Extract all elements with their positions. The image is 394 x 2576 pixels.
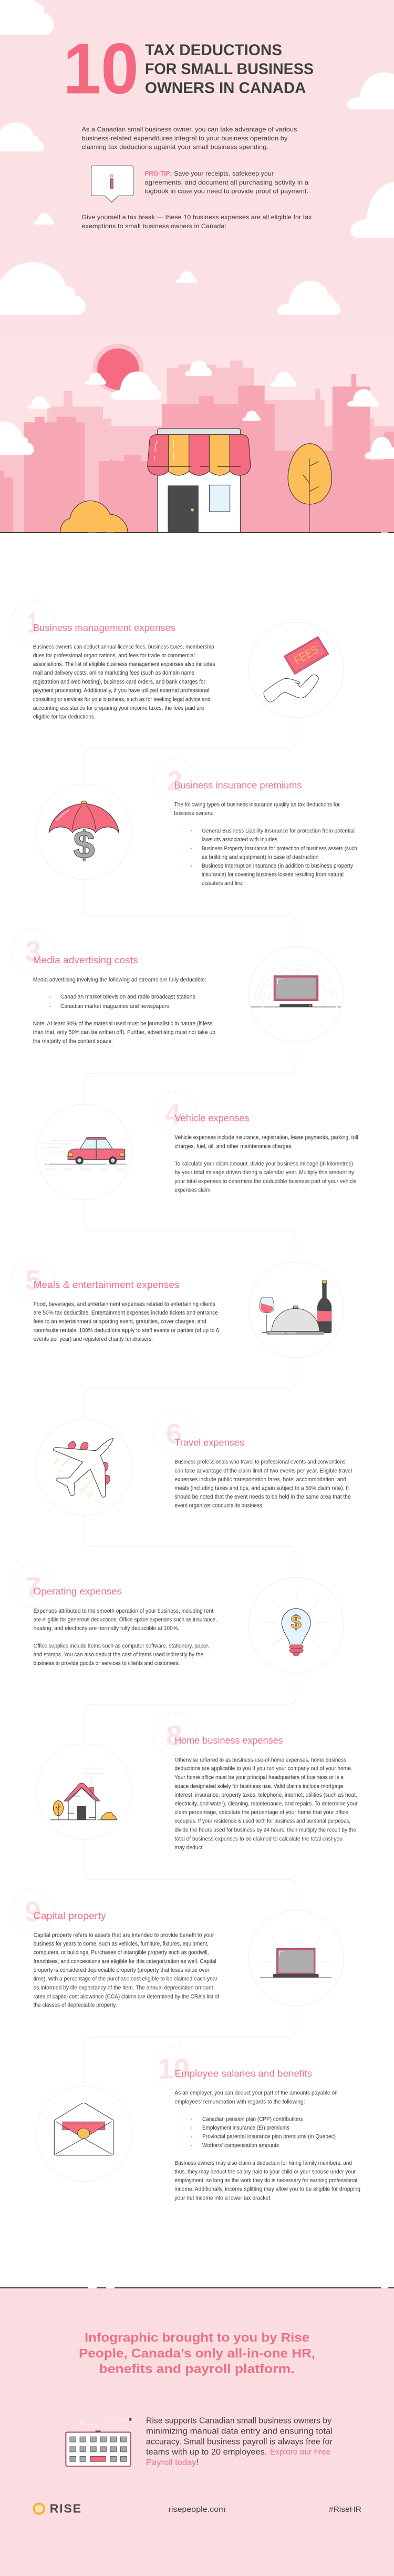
body text: Food, beverages, and entertainment expenses related to entertaining clients xyxy=(34,1301,215,1308)
sun xyxy=(92,344,143,393)
body text: As an employer, you can deduct your part of the amounts payable on xyxy=(174,2090,338,2096)
body text: expenses include public transportation fares, hotel accommodation, and xyxy=(174,1477,346,1483)
icon: umbrella over dollar: $ xyxy=(73,823,95,867)
body text: Business professionals who travel to professional events and conventions xyxy=(174,1459,346,1465)
heading: Meals & entertainment expenses xyxy=(34,1279,179,1290)
body text: event organizer conducts its business. xyxy=(174,1503,264,1509)
footer text: minimizing manual data entry and ensuring total xyxy=(146,2427,333,2436)
bullet list xyxy=(191,828,357,887)
pro-tip text: logbook in case you need to provide proof of payment. xyxy=(145,187,308,195)
bullet list: Business Interruption Insurance (in addition to business property xyxy=(202,863,354,869)
body text: To calculate your claim amount, divide your business mileage (in kilometres) xyxy=(174,1161,353,1167)
title: FOR SMALL BUSINESS xyxy=(145,60,314,78)
body text: heating, and electricity are normally fully deductible at 100%. xyxy=(34,1625,179,1632)
note text: Note: At least 80% of the material used must be journalistic in nature (if less xyxy=(33,1021,213,1027)
panel: 7 operating expenses xyxy=(12,1564,344,1673)
body text: rates of capital cost allowance (CCA) claims are determined by the CRA's list of xyxy=(34,1993,219,2000)
pro-tip text: Save your receipts, safekeep your xyxy=(174,170,274,177)
closing text: Business owners may also claim a deduction for hiring family members, and xyxy=(174,2160,352,2166)
body text xyxy=(34,1608,217,1667)
icon: light bulb with dollar: $ xyxy=(291,1611,302,1633)
body text xyxy=(174,2090,338,2105)
body text: payment processing. Additionally, if you have utilized external professional xyxy=(33,688,209,694)
closing intro text: Give yourself a tax break — these 10 business expenses are all eligible for tax xyxy=(81,213,312,221)
panel: 9 capital property: 9 xyxy=(25,1896,41,1928)
note text: the majority of the content space. xyxy=(33,1038,113,1044)
icon: light bulb with dollar xyxy=(248,1577,344,1673)
body text: dues for professional organizations, and fees for trade or commercial xyxy=(33,653,195,659)
body text: Capital property refers to assets that are intended to provide benefit to your xyxy=(34,1932,214,1939)
body text: Media advertising involving the following ad streams are fully deductible: xyxy=(33,976,206,983)
icon: television with signal arcs xyxy=(248,946,344,1042)
panel: 6 travel expenses: 6 xyxy=(166,1418,182,1450)
closing text: thus, they may deduct the salary paid to your child or your spouse under your xyxy=(174,2169,356,2175)
panel: 3 media advertising costs xyxy=(12,929,344,1044)
bullet list xyxy=(49,994,195,1010)
body text: eligible for tax deductions. xyxy=(33,714,96,720)
bush xyxy=(60,501,128,533)
closing text: income. Additionally, income splitting may allow you to be eligible for dropping xyxy=(174,2186,360,2193)
panel: 4 vehicle expenses xyxy=(36,1092,358,1200)
footer text: ! xyxy=(196,2458,199,2467)
icon: fees ticket in hand: FEES xyxy=(292,643,321,667)
body text: are 50% tax deductible. Entertainment expenses include tickets and entrance xyxy=(34,1310,218,1316)
body text xyxy=(174,1459,352,1509)
footer text: teams with up to 20 employees. xyxy=(146,2448,267,2457)
bullet list: Workers' compensation amounts xyxy=(202,2142,279,2149)
panel: 1 business management expenses: 1 xyxy=(27,607,38,639)
title: OWNERS IN CANADA xyxy=(145,79,306,97)
body text: business to provide goods or services to clients and customers. xyxy=(34,1661,180,1667)
panel: 5 meals and entertainment expenses xyxy=(12,1258,344,1358)
body text: and stamps. You can also deduct the cost of items used indirectly by the xyxy=(34,1652,203,1658)
bullet list: lawsuits associated with injuries xyxy=(202,837,277,843)
footer heading: Infographic brought to you by Rise xyxy=(85,2331,309,2345)
illustration: city skyline with storefront xyxy=(0,336,394,533)
bullet list: insurance) for covering business losses resulting from natural xyxy=(202,872,344,878)
body text: Vehicle expenses include insurance, registration, lease payments, parking, toll xyxy=(174,1135,358,1141)
body text: claim percentage, calculate the percentage of your home that your office xyxy=(174,1809,348,1816)
panel: 4 vehicle expenses: 4 xyxy=(165,1098,181,1129)
intro text: business-related expenditures integral to your business operation by xyxy=(81,135,287,142)
icon: airplane xyxy=(36,1420,132,1515)
panel: 2 business insurance premiums: 2 xyxy=(167,766,182,797)
bullet list xyxy=(191,2116,336,2149)
bullet list: Canadian pension plan (CPP) contributions xyxy=(202,2116,303,2122)
icon: house xyxy=(36,1744,132,1839)
body text: meals (including taxes and tips, and again subject to a 50% claim rate). It xyxy=(174,1485,349,1491)
bullet list: Canadian market television and radio broadcast stations xyxy=(60,994,195,1000)
heading: Capital property xyxy=(34,1910,107,1921)
heading: Operating expenses xyxy=(34,1586,122,1597)
body text: business for years to come, such as vehicles, furniture, fixtures, equipment, xyxy=(34,1941,209,1947)
bullet list: Employment insurance (EI) premiums xyxy=(202,2125,289,2131)
panel: 1 business management expenses xyxy=(12,600,344,720)
heading: Business insurance premiums xyxy=(174,779,302,791)
body text: space designated solely for business use. Valid claims include mortgage xyxy=(174,1783,343,1789)
body text: room/suite rentals. 100% deductions apply to staff events or parties (of up to 6 xyxy=(34,1327,219,1333)
panel: 3 media advertising costs: 3 xyxy=(25,936,41,968)
closing text: employment, so long as the work they do is necessary for earning professional xyxy=(174,2177,357,2184)
body text: mail and delivery costs, online marketing fees (such as domain name xyxy=(33,670,194,676)
body text: employees' remuneration with regards to the following: xyxy=(174,2099,305,2105)
heading: Employee salaries and benefits xyxy=(174,2068,312,2079)
title xyxy=(145,42,314,97)
icon: fees ticket in hand xyxy=(248,622,344,718)
heading: Vehicle expenses xyxy=(174,1113,249,1124)
logo: Rise xyxy=(34,2502,81,2516)
title: TAX DEDUCTIONS xyxy=(145,42,282,59)
body text: expenses claim. xyxy=(174,1187,212,1194)
footer text: Explore our Free xyxy=(270,2448,330,2457)
body text: charges, fuel, oil, and other maintenance charges. xyxy=(174,1144,293,1150)
heading: Media advertising costs xyxy=(33,954,138,965)
panel: header xyxy=(0,0,394,336)
body text: as informed by life expectancy of the item. The annual depreciation amount xyxy=(34,1984,213,1991)
panel: 5 meals and entertainment expenses: 5 xyxy=(25,1265,41,1296)
buildings: back layer xyxy=(0,361,394,533)
body text: business owners: xyxy=(174,810,213,817)
body text: registration and web hosting), business card orders, and bank charges for xyxy=(33,679,205,685)
footer heading xyxy=(79,2331,315,2376)
closing text: your net income into a lower tax bracket. xyxy=(174,2195,272,2201)
body text xyxy=(174,1135,358,1194)
bullet list: Provincial parental insurance plan premiums (in Quebec) xyxy=(202,2134,336,2140)
body text: are eligible for generous deductions. Office space expenses such as insurance, xyxy=(34,1617,217,1623)
body text: time), with a percentage of the purchase cost eligible to be claimed each year xyxy=(34,1976,217,1982)
clouds xyxy=(0,0,394,315)
storefront xyxy=(148,429,251,533)
note text: than that, only 50% can be written off). Further, advertising must not take up xyxy=(33,1030,215,1036)
body text: computers, or buildings. Purchases of intangible property such as goodwill, xyxy=(34,1950,209,1956)
body text: divide the hours used for business by 24 hours, then multiply the result by the xyxy=(174,1827,356,1833)
intro text: claiming tax deductions against your small business spending. xyxy=(81,144,268,151)
bullet list: as building and equipment) in case of destruction xyxy=(202,854,319,860)
bullet list: disasters and fire. xyxy=(202,880,244,887)
footer text: Payroll today xyxy=(146,2458,196,2467)
pro-tip text: agreements, and document all purchasing activity in a xyxy=(145,179,308,186)
bullet list: General Business Liability Insurance for protection from potential xyxy=(202,828,355,834)
body text: Otherwise referred to as business-use-of-home expenses, home business xyxy=(174,1757,346,1763)
panel: 9 capital property xyxy=(12,1889,344,2009)
intro text xyxy=(81,126,297,151)
footer text: accuracy. Small business payroll is always free for xyxy=(146,2437,333,2446)
body text: may deduct. xyxy=(174,1845,204,1851)
body text xyxy=(174,1757,358,1851)
hashtag: #RiseHR xyxy=(329,2505,361,2514)
body text: the classes of depreciable property. xyxy=(34,2002,117,2009)
body text xyxy=(33,644,215,720)
heading: Travel expenses xyxy=(174,1437,244,1448)
closing intro text xyxy=(81,213,312,230)
body text: Expenses attributed to the smooth operation of your business, including rent, xyxy=(34,1608,215,1614)
body text: total of business expenses to be claimed to calculate the total cost you xyxy=(174,1836,343,1842)
body text: Business owners can deduct annual licence fees, business taxes, membership xyxy=(33,644,214,650)
pro-tip text xyxy=(145,170,308,195)
note text xyxy=(33,1021,215,1044)
body text: by your total mileage driven during a calendar year. Multiply this amount by xyxy=(174,1169,355,1176)
body text xyxy=(174,801,340,817)
footer heading: benefits and payroll platform. xyxy=(99,2362,294,2376)
icon: meal and wine xyxy=(248,1262,344,1358)
body text: your total expenses to determine the deductible business part of your vehicle xyxy=(174,1178,357,1185)
closing text xyxy=(174,2160,360,2201)
body text xyxy=(34,1932,219,2009)
heading: Home business expenses xyxy=(174,1735,283,1746)
icon: car xyxy=(36,1104,132,1200)
bullet list: Canadian market magazines and newspapers xyxy=(60,1003,169,1010)
body text: The following types of business insurance qualify as tax deductions for xyxy=(174,801,340,808)
body text: associations. The list of eligible business management expenses also includes xyxy=(33,661,215,668)
connector line between sections xyxy=(84,718,296,2086)
footer heading: People, Canada’s only all-in-one HR, xyxy=(79,2346,315,2360)
intro text: As a Canadian small business owner, you can take advantage of various xyxy=(81,126,297,133)
closing intro text: exemptions to small business owners in Canada: xyxy=(81,222,226,230)
bullet list: Business Property Insurance for protection of business assets (such xyxy=(202,846,357,852)
website: risepeople.com xyxy=(168,2505,226,2514)
body text xyxy=(34,1301,219,1342)
body text: Your home office must be your principal headquarters of business or is a xyxy=(174,1775,344,1781)
body text: events per year) and registered charity fundraisers. xyxy=(34,1336,153,1342)
panel: 10 employee salaries and benefits: 10 xyxy=(158,2053,190,2085)
city clouds xyxy=(0,361,394,459)
icon: keyboard xyxy=(66,2418,131,2466)
icon: info speech bubble xyxy=(91,166,133,202)
body text: consulting or services for your business, such as for seeking legal advice and xyxy=(33,696,211,702)
tree xyxy=(288,444,331,533)
logo: Rise: RISE xyxy=(50,2502,81,2516)
panel: 8 home business expenses: 8 xyxy=(166,1720,182,1752)
panel: 6 travel expenses xyxy=(36,1410,352,1515)
footer text xyxy=(146,2416,333,2467)
body text: property is considered depreciable property (property that loses value over xyxy=(34,1967,210,1973)
body text: fees to an entertainment or sporting event, gratuities, cover charges, and xyxy=(34,1319,206,1325)
body text: should be noted that the event needs to be held in the same area that the xyxy=(174,1494,351,1500)
title number: 10 xyxy=(63,28,139,109)
body text: occupies. If your residence is used both for business and personal purposes, xyxy=(174,1818,350,1825)
body text: deductions are applicable to you if you run your company out of your home. xyxy=(174,1766,352,1772)
body text: Office supplies include items such as computer software, stationery, paper, xyxy=(34,1643,209,1649)
body text: franchises, and concessions are eligible for this categorization as well. Capital xyxy=(34,1958,216,1964)
footer text: Rise supports Canadian small business owners by xyxy=(146,2416,331,2425)
body text: interest, insurance, property taxes, telephone, internet, utilities (such as heat, xyxy=(174,1792,357,1798)
pro-tip text: PRO-TIP: xyxy=(145,170,172,177)
icon: umbrella over dollar xyxy=(36,784,132,880)
icon: laptop xyxy=(248,1910,344,2006)
icon: envelope with money xyxy=(36,2086,132,2182)
panel: 7 operating expenses: 7 xyxy=(25,1571,41,1603)
body text: accounting assistance for preparing your income taxes, the fees paid are xyxy=(33,705,204,711)
body text: can take advantage of the claim limit of two events per year. Eligible travel xyxy=(174,1468,352,1474)
heading: Business management expenses xyxy=(33,622,175,633)
panel: 2 business insurance premiums xyxy=(36,758,357,887)
panel: footer xyxy=(0,2288,394,2576)
panel: 10 employee salaries and benefits xyxy=(36,2046,360,2201)
buildings: front layer xyxy=(0,374,394,533)
panel: 8 home business expenses xyxy=(36,1713,358,1851)
body text: electricity, and water), cleaning, maintenance, and repairs. To determine your xyxy=(174,1800,358,1807)
